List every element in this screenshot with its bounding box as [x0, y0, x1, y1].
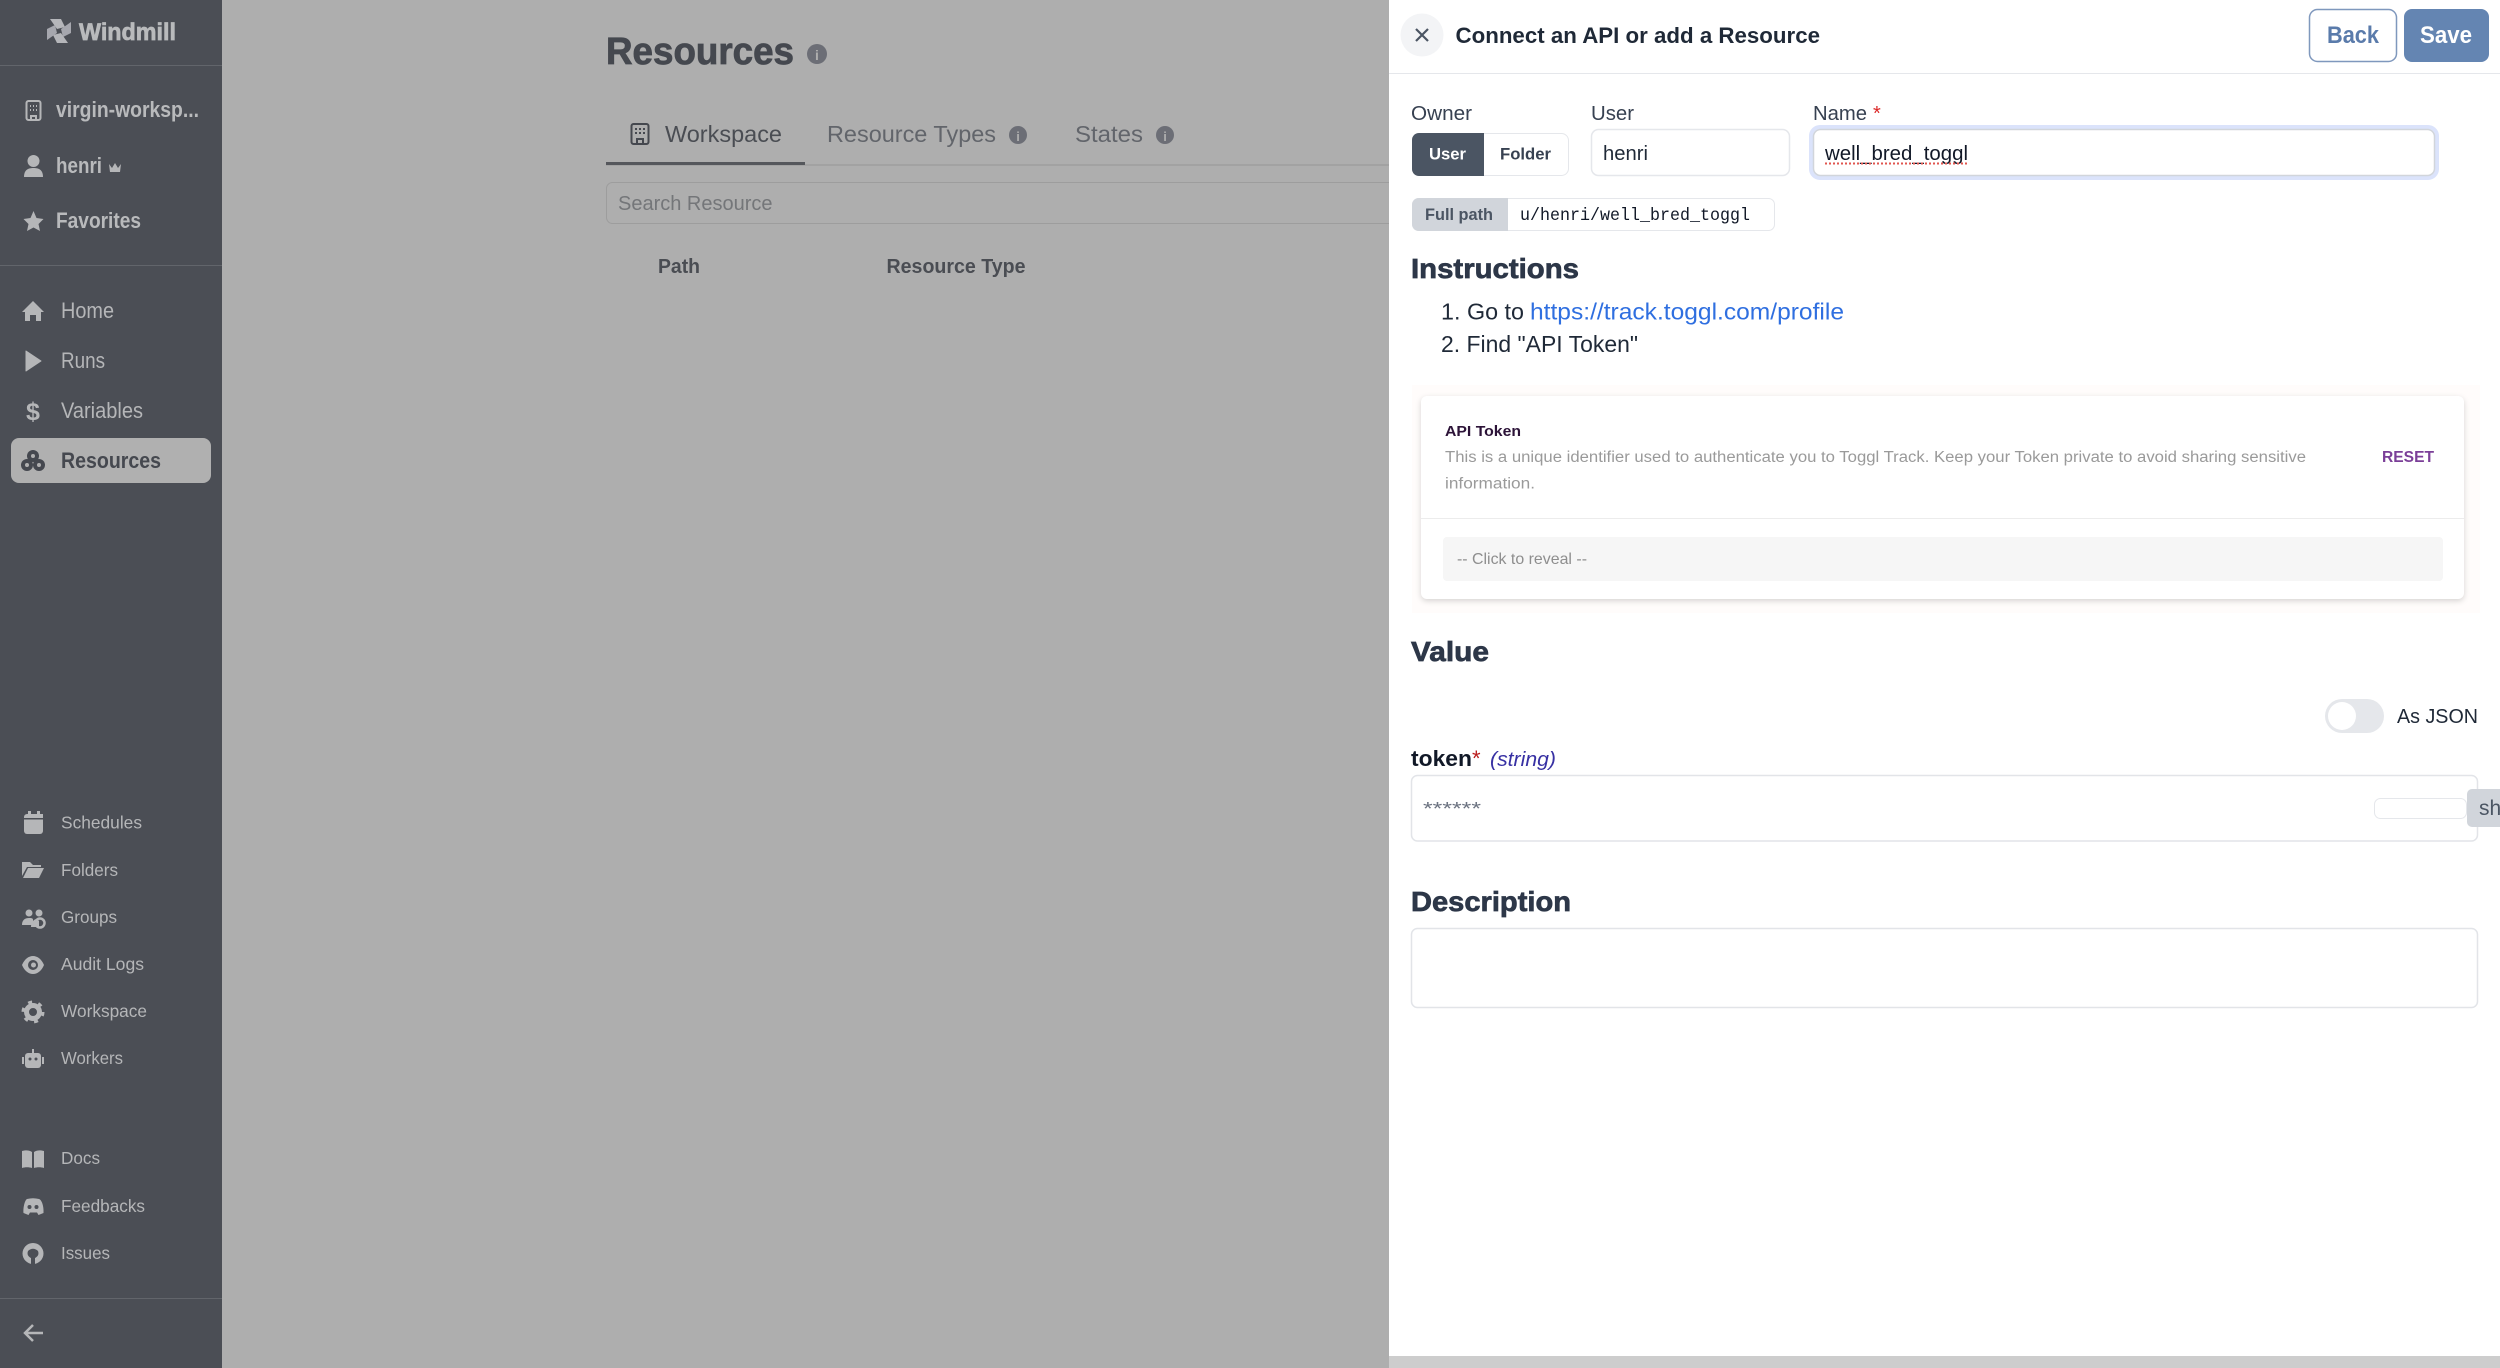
nav: Variables [26, 398, 143, 426]
instructions list: 2. Find "API Token" [1441, 331, 1638, 357]
field: name [1811, 103, 2437, 178]
screenshot: Toggl API token: RESET [2382, 449, 2434, 466]
field: user [1591, 103, 1790, 176]
full path [1412, 198, 1774, 231]
button: Save [2404, 9, 2489, 62]
toggle: As JSON: As JSON [2397, 706, 2478, 728]
table header [658, 256, 1026, 278]
close button [1400, 14, 1444, 56]
nav: Workers [22, 1048, 123, 1068]
heading: Description: Description [1411, 886, 1571, 917]
nav: Variables: Variables [61, 398, 143, 423]
page heading: i [815, 47, 819, 63]
nav: Schedules: Schedules [61, 812, 142, 832]
nav: Issues [22, 1243, 110, 1264]
workspace selector: virgin-worksp... [56, 97, 199, 122]
page heading: Resources [606, 31, 794, 73]
tab: States: States [1075, 121, 1143, 147]
heading: Value: Value [1411, 636, 1489, 667]
table header: Path [658, 256, 700, 278]
toggle: As JSON [2325, 699, 2478, 733]
screenshot: Toggl API token: -- Click to reveal -- [1457, 551, 1587, 568]
arrow: collapse sidebar [25, 1325, 43, 1341]
tabs [606, 121, 1390, 166]
screenshot: Toggl API token: API Token [1445, 423, 1521, 440]
instructions list: 1. Go to [1441, 298, 1524, 324]
nav: Runs: Runs [61, 348, 105, 373]
instructions list [1441, 298, 1844, 357]
nav: Docs [22, 1148, 100, 1168]
screenshot: Toggl API token [1412, 385, 2480, 613]
user: henri [24, 153, 121, 178]
nav: Home: Home [61, 298, 114, 323]
field: token: ****** [1423, 799, 1481, 819]
tab: Workspace: Workspace [665, 121, 782, 147]
nav: Feedbacks: Feedbacks [61, 1196, 145, 1216]
nav: Workspace: Workspace [61, 1001, 147, 1021]
button: Back: Back [2327, 22, 2380, 49]
nav: Folders [22, 860, 118, 880]
nav: Schedules [24, 811, 142, 834]
nav: Resources active [11, 438, 211, 483]
instructions list: https://track.toggl.com/profile [1530, 298, 1844, 324]
heading: Instructions: Instructions [1411, 253, 1579, 284]
field: name: well_bred_toggl [1824, 143, 1968, 165]
nav: Issues: Issues [61, 1243, 110, 1263]
drawer panel [1389, 0, 2500, 1368]
nav: Home [22, 298, 114, 323]
main content behind overlay [606, 31, 1406, 278]
field: name: Name [1813, 103, 1867, 125]
favorites [24, 208, 141, 233]
table header: Resource Type [886, 256, 1026, 278]
tab: Resource Types: i [1016, 129, 1020, 144]
nav: Resources active: Resources [61, 448, 161, 473]
sidebar [0, 0, 222, 1368]
field: user: henri [1603, 143, 1648, 165]
tab: Resource Types: Resource Types [827, 121, 996, 147]
field: owner: Owner [1411, 103, 1472, 125]
nav: Variables: $ [26, 398, 40, 426]
logo: Windmill: Windmill [79, 19, 176, 46]
drawer title: Connect an API or add a Resource [1456, 23, 1820, 48]
favorites: Favorites [56, 208, 141, 233]
field: owner: User [1429, 144, 1466, 164]
field: name: * [1873, 103, 1881, 125]
field: owner [1411, 103, 1568, 176]
nav: Groups: Groups [61, 907, 117, 927]
tab: States: i [1163, 129, 1167, 144]
full path: u/henri/well_bred_toggl [1520, 206, 1750, 226]
field: owner: Folder [1500, 144, 1551, 164]
nav: Folders: Folders [61, 860, 118, 880]
button: Back [2310, 10, 2396, 62]
search input: Search Resource [618, 193, 772, 215]
nav: Feedbacks [23, 1196, 145, 1216]
nav: Docs: Docs [61, 1148, 100, 1168]
screenshot: Toggl API token: This is a unique identifier used to authenticate you to Toggl Track. Keep your Token private to avoid sharing sensitive [1445, 449, 2306, 466]
field: user: User [1591, 103, 1634, 125]
nav: Workspace [23, 1001, 147, 1022]
nav: Runs [26, 348, 105, 373]
screenshot: Toggl API token: information. [1445, 476, 1535, 492]
full path: Full path [1425, 205, 1493, 224]
search input [606, 182, 1406, 224]
field: token [1411, 746, 2500, 841]
nav: Workers: Workers [61, 1048, 123, 1068]
nav: Audit Logs: Audit Logs [61, 954, 144, 974]
nav: Groups [22, 907, 117, 928]
tab: States [1075, 121, 1174, 147]
field: token: * [1472, 746, 1481, 771]
field: token: (string) [1490, 749, 1556, 771]
field: description [1412, 928, 2478, 1008]
horizontal scrollbar [1389, 1356, 2500, 1368]
nav: Audit Logs [22, 954, 144, 974]
field: token: token [1411, 746, 1472, 771]
user: henri: henri [56, 153, 102, 178]
button: Save: Save [2420, 22, 2472, 49]
